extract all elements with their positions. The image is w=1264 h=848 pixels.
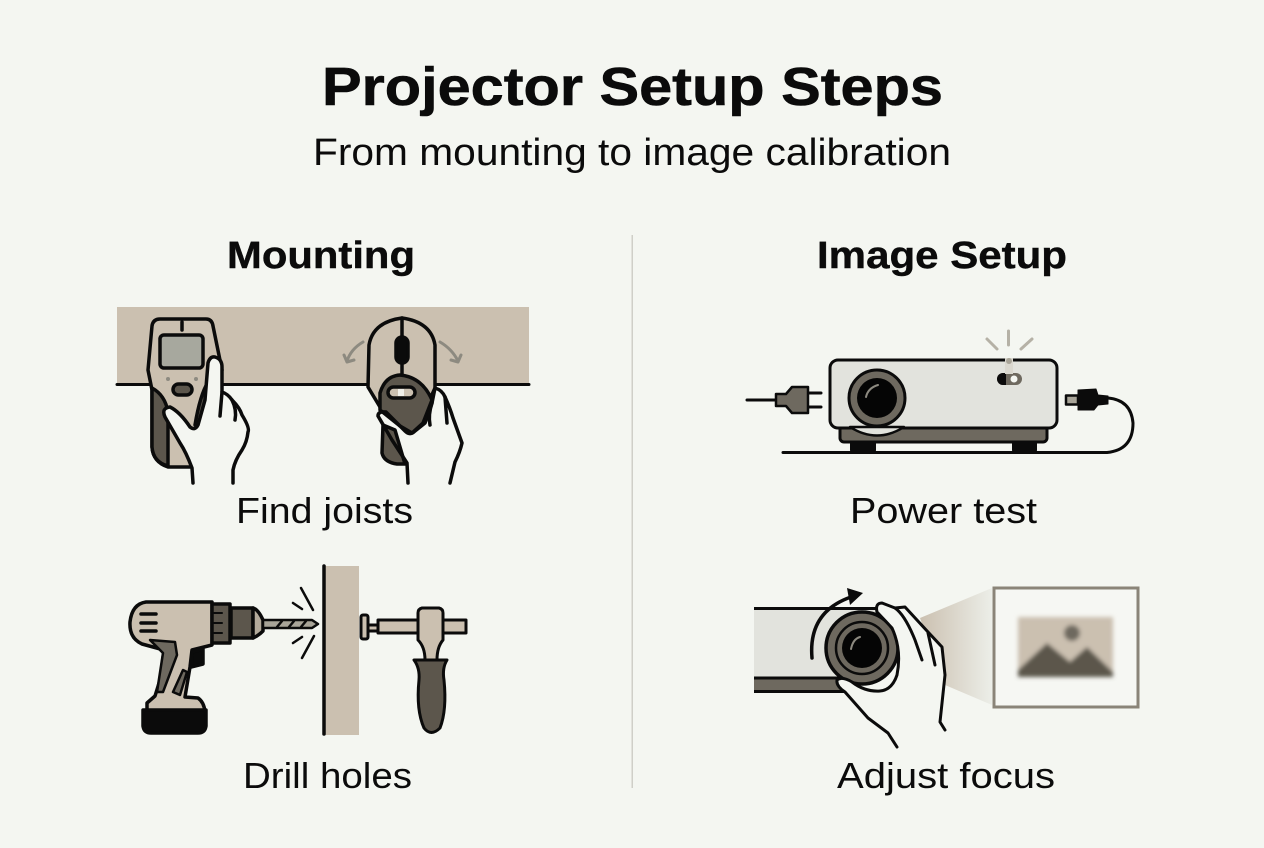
projector feet	[850, 440, 1037, 452]
icon: right plug	[1066, 389, 1108, 410]
title: Projector Setup Steps	[322, 57, 943, 117]
screen frame	[994, 588, 1138, 707]
light beam	[920, 588, 992, 705]
projector side	[754, 608, 878, 692]
projector lens	[849, 370, 905, 426]
icon: anchor and driver	[361, 608, 466, 732]
label: drill holes: Drill holes	[243, 755, 412, 796]
arrows: scanner sweep	[344, 342, 461, 362]
projector body	[830, 360, 1057, 428]
heading: mounting: Mounting	[227, 235, 415, 277]
label: find joists: Find joists	[236, 490, 413, 531]
illustration: find joists	[117, 307, 529, 483]
power switch	[997, 373, 1022, 385]
illustration: drill holes	[130, 566, 466, 735]
blurred image	[1018, 617, 1113, 677]
power cable and ground line	[783, 398, 1133, 452]
lens	[826, 612, 898, 684]
illustration: power test	[747, 331, 1133, 452]
heading: image setup: Image Setup	[817, 235, 1067, 277]
icon: mouse-shaped scanner	[368, 318, 435, 464]
lens notch	[850, 427, 904, 436]
light rays	[987, 331, 1032, 349]
illustration: adjust focus	[754, 588, 1138, 747]
projector base	[840, 426, 1047, 442]
sparks	[293, 588, 314, 658]
icon: drill	[130, 602, 318, 733]
icon: stud finder	[148, 319, 222, 467]
wall section	[324, 566, 359, 735]
wall band	[117, 307, 529, 384]
indicator light	[1005, 358, 1013, 374]
icon: hand on stud finder	[164, 357, 248, 483]
label: adjust focus: Adjust focus	[837, 755, 1055, 796]
icon: hand on lens	[837, 603, 945, 747]
arrow: rotate	[812, 588, 863, 658]
icon: left plug	[747, 387, 821, 413]
label: power test: Power test	[850, 490, 1037, 531]
subtitle: From mounting to image calibration	[313, 132, 951, 174]
icon: hand on scanner	[378, 388, 462, 483]
